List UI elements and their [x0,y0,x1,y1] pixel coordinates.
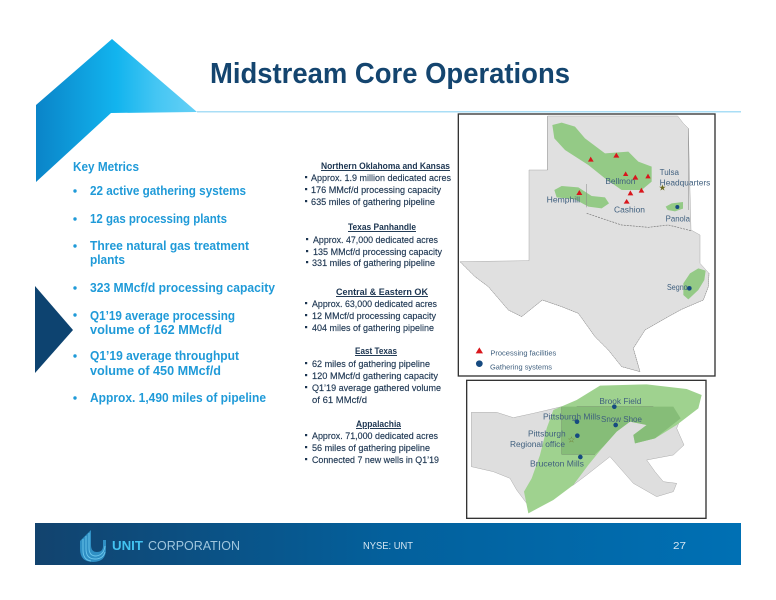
map labels: Segno [667,282,688,292]
map labels: Panola [666,213,690,223]
map legend: Processing facilities [490,349,557,358]
panel: key metrics [73,160,275,405]
region: Texas Panhandle [306,222,442,269]
ticker: NYSE: UNT [363,541,413,552]
metric: processing capacity: 323 MMcf/d processing capacity [90,281,275,295]
metric: treatment plants: Three natural gas treatment [90,239,250,253]
top-left chevron accent [36,39,197,182]
icon: headquarters star: ★ [659,182,667,192]
map labels: Bruceton Mills [530,458,584,468]
region: Texas Panhandle: 135 MMcf/d processing capacity [313,247,442,258]
region: Central and Eastern OK: Approx. 63,000 dedicated acres [312,299,437,310]
region: Texas Panhandle: Approx. 47,000 dedicated acres [313,235,438,246]
logo wordmark: UNIT [112,538,143,553]
metric: throughput [73,349,240,378]
icon: regional office star: ☆ [568,435,576,445]
panel: Oklahoma and Texas map [458,114,715,376]
region: Appalachia: 56 miles of gathering pipeline [312,443,430,454]
region: East Texas: 62 miles of gathering pipeline [312,359,430,370]
area: Appalachia play [524,384,702,513]
region: Northern Oklahoma and Kansas: 635 miles of gathering pipeline [311,197,435,208]
map legend [476,347,557,372]
map labels: Pittsburgh Mills [543,411,600,421]
area: north Oklahoma and Kansas play [552,123,652,190]
region: Central and Eastern OK [305,287,437,334]
metric: throughput: volume of 450 MMcf/d [90,364,221,378]
map: state outline [471,407,684,510]
map: state lines [562,407,653,454]
icons: gathering systems [575,404,618,459]
map labels [510,396,642,468]
region: East Texas: Q1’19 average gathered volume [312,383,441,394]
area: Panola play [666,202,683,211]
icon: Unit logo mark [80,530,106,562]
region: Northern Oklahoma and Kansas: Approx. 1.9 million dedicated acres [311,173,451,184]
region: Appalachia: Approx. 71,000 dedicated acres [312,431,438,442]
map labels: Bellmon [605,176,636,186]
map: state outline [460,116,709,372]
area: Segno play [683,268,706,299]
region: Central and Eastern OK: 12 MMcf/d processing capacity [312,311,436,322]
region: Appalachia: Connected 7 new wells in Q1’19 [312,455,439,466]
map labels: Regional office [510,439,565,449]
panel: Appalachia map [467,380,706,518]
region: Northern Oklahoma and Kansas: Northern Oklahoma and Kansas [321,161,450,172]
panel: regional details [305,161,451,466]
map: state border [587,213,691,231]
footer banner [35,523,741,565]
map: Texas coast and river border [460,262,709,372]
region: Appalachia: Appalachia [356,419,402,430]
metric: processing volume [73,309,235,337]
metric: throughput: Q1’19 average throughput [90,349,240,363]
metric: gathering systems: 22 active gathering systems [90,184,246,198]
title: Midstream Core Operations [210,58,570,90]
region: East Texas [305,346,441,406]
header rule [197,111,741,112]
heading: key metrics: Key Metrics [73,160,139,174]
footer banner: CORPORATION [148,538,240,553]
icons: gathering systems [675,205,692,291]
area: Hemphill play [554,186,609,208]
region: East Texas: East Texas [355,346,397,357]
map labels: Brook Field [599,396,642,406]
region: Appalachia [305,419,439,466]
metric: pipeline miles: Approx. 1,490 miles of pipeline [90,391,266,405]
metric: processing volume: volume of 162 MMcf/d [90,323,222,337]
map labels: Headquarters [660,177,710,187]
metric: treatment plants: plants [90,253,125,267]
map labels: Pittsburgh [528,428,566,438]
page number: 27 [673,540,686,552]
map legend: Gathering systems [490,363,552,372]
region: Texas Panhandle: Texas Panhandle [348,222,416,233]
region: East Texas: of 61 MMcf/d [312,395,367,406]
metric: gas processing plants: 12 gas processing plants [90,212,227,226]
map labels [547,167,710,292]
map: state lines [548,116,688,210]
map labels: Hemphill [547,195,580,205]
region: East Texas: 120 MMcf/d gathering capacity [312,371,438,382]
map labels: Cashion [614,204,645,214]
map labels: Tulsa [660,167,679,177]
map labels: Snow Shoe [601,414,642,424]
icons: processing facilities [576,153,651,204]
area: Pennsylvania overlap [562,407,681,454]
region: Central and Eastern OK: Central & Eastern OK [336,287,428,298]
metric: processing volume: Q1’19 average processing [90,309,235,323]
region: Northern Oklahoma and Kansas [305,161,451,208]
metric: treatment plants [73,239,250,267]
side arrow marker [35,286,73,373]
region: Northern Oklahoma and Kansas: 176 MMcf/d processing capacity [311,185,441,196]
region: Texas Panhandle: 331 miles of gathering pipeline [312,258,435,269]
region: Central and Eastern OK: 404 miles of gathering pipeline [312,323,434,334]
